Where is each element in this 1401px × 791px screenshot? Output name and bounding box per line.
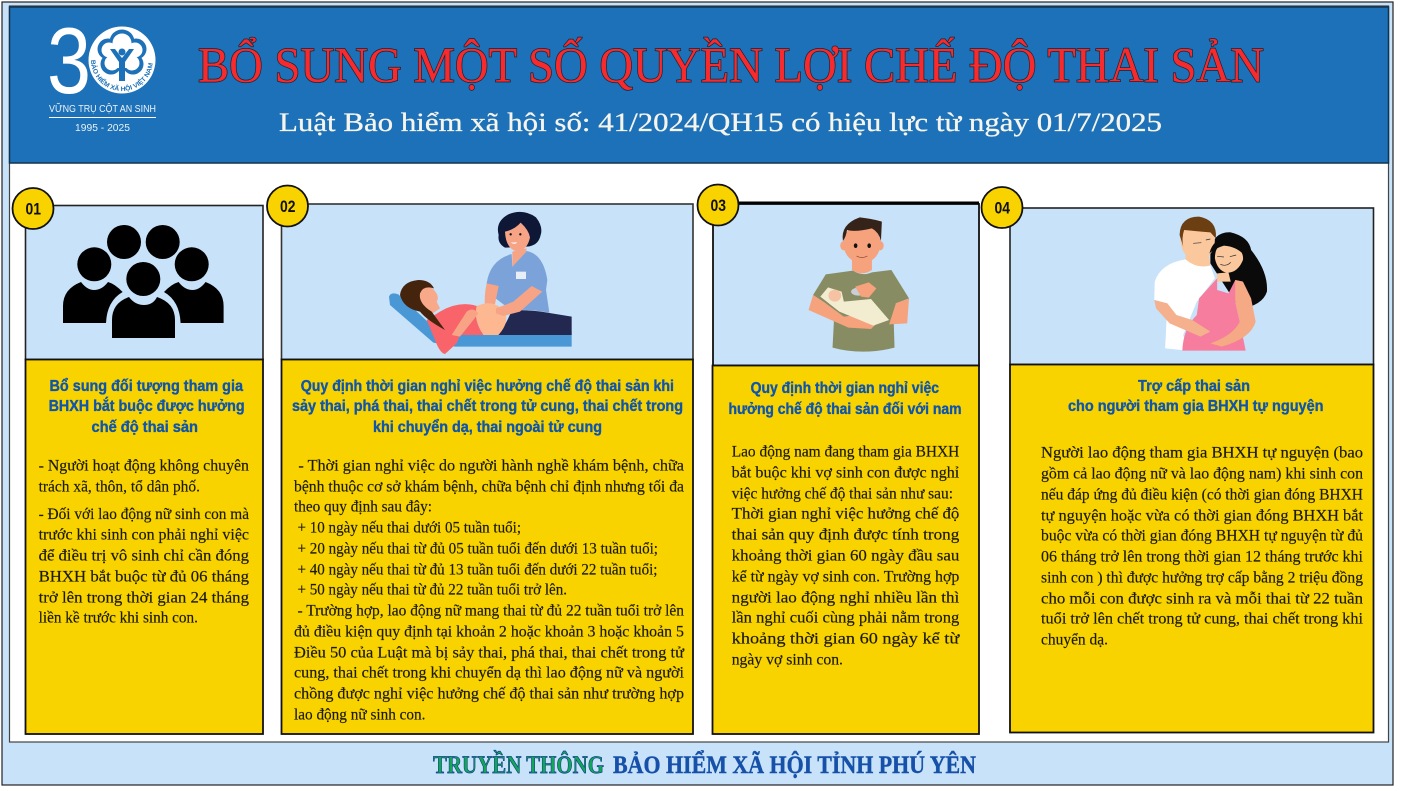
heading 01: chế độ thai sản [92, 419, 198, 436]
header banner [8, 6, 1390, 164]
heading 03: hưởng chế độ thai sản đối với nam [728, 401, 962, 418]
heading 01: BHXH bắt buộc được hưởng [49, 397, 245, 415]
body text 02: + 40 ngày nếu thai từ đủ 13 tuần tuổi đến dưới 22 tuần tuổi; [298, 562, 658, 578]
body text 01: để điều trị vô sinh chỉ cần đóng [39, 548, 249, 564]
body text 03: lần nghỉ cuối cùng phải nằm trong [732, 610, 959, 626]
body text 04: tự nguyện hoặc vừa có thời gian đóng BHXH bắt [1041, 508, 1364, 524]
body text 01: trước khi sinh con phải nghỉ việc [39, 526, 249, 544]
logo: 30 years: 3 [47, 8, 91, 113]
title: BỔ SUNG MỘT SỐ QUYỀN LỢI CHẾ ĐỘ THAI SẢN [198, 36, 1264, 92]
body text 02: + 50 ngày nếu thai từ đủ 22 tuần tuổi trở lên. [298, 582, 567, 598]
heading 02: khi chuyển dạ, thai ngoài tử cung [373, 419, 602, 436]
heading 03 [728, 380, 962, 418]
subtitle: Luật Bảo hiểm xã hội số: 41/2024/QH15 có hiệu lực từ ngày 01/7/2025 [279, 107, 1162, 137]
body text 02: Điều 50 của Luật mà bị sảy thai, phá thai, thai chết trong tử [294, 644, 685, 662]
number badge 01 [12, 188, 54, 229]
body text 01: trở lên trong thời gian 24 tháng [39, 590, 249, 606]
logo: 30 years: BẢO HIỂM XÃ HỘI VIỆT NAM [90, 60, 153, 92]
body text 03: kể từ ngày vợ sinh con. Trường hợp [732, 568, 959, 586]
body text 03: việc hưởng chế độ thai sản như sau: [732, 486, 953, 502]
body text 03 [732, 444, 961, 668]
body text 02 [294, 458, 685, 724]
body text 03: khoảng thời gian 60 ngày đầu sau [732, 548, 959, 564]
heading 02: sảy thai, phá thai, thai chết trong tử cung, thai chết trong [292, 398, 683, 415]
body text 01: liền kề trước khi sinh con. [39, 610, 198, 626]
panel 01 [12, 188, 263, 734]
body text 04 [1041, 444, 1364, 648]
body text 02: chồng được nghỉ việc hưởng chế độ thai sản như trường hợp [294, 686, 684, 702]
body text 04: gồm cả lao động nữ và lao động nam) khi sinh con [1041, 466, 1363, 482]
heading 02 [292, 378, 683, 436]
body text 04: tuổi trở lên chết trong tử cung, thai chết trong khi [1041, 610, 1364, 628]
number badge 04: 04 [994, 200, 1011, 218]
heading 04: cho người tham gia BHXH tự nguyện [1068, 398, 1324, 415]
logo: 30 years: 1995 - 2025 [75, 123, 130, 134]
illustration: father holding baby [809, 217, 909, 352]
body text 02: lao động nữ sinh con. [294, 706, 426, 724]
body text 03: bắt buộc khi vợ sinh con được nghỉ [732, 464, 960, 482]
body text 02: + 10 ngày nếu thai dưới 05 tuần tuổi; [298, 520, 521, 536]
heading 04 [1068, 378, 1324, 415]
body text 03: Lao động nam đang tham gia BHXH [732, 444, 960, 460]
illustration: nurse examining pregnant woman [389, 212, 572, 354]
body text 04: cho mỗi con được sinh ra và mỗi thai từ 22 tuần [1041, 590, 1363, 608]
body text 01: - Người hoạt động không chuyên [39, 458, 249, 474]
footer blue label: BẢO HIỂM XÃ HỘI TỈNH PHÚ YÊN [613, 750, 976, 779]
body text 01 [39, 458, 249, 626]
body text 02: cung, thai chết trong khi chuyển dạ thì lao động nữ và người [294, 664, 685, 682]
body text 04: nếu đáp ứng đủ điều kiện (có thời gian đóng BHXH [1041, 486, 1363, 504]
panel 02 [267, 186, 693, 734]
body text 01: - Đối với lao động nữ sinh con mà [39, 506, 249, 523]
heading 03: Quy định thời gian nghỉ việc [751, 380, 939, 397]
logo: 30 years: VỮNG TRỤ CỘT AN SINH [49, 102, 156, 115]
body text 02: theo quy định sau đây: [294, 498, 432, 516]
heading 02: Quy định thời gian nghỉ việc hưởng chế độ thai sản khi [301, 378, 674, 395]
body text 04: buộc vừa có thời gian đóng BHXH tự nguyện từ đủ [1041, 528, 1363, 544]
body text 04: Người lao động tham gia BHXH tự nguyện (bao [1041, 444, 1363, 462]
heading 01 [49, 378, 245, 436]
body text 02: bệnh thuộc cơ sở khám bệnh, chữa bệnh chỉ định nhưng tối đa [294, 478, 684, 496]
number badge 01: 01 [26, 200, 41, 218]
number badge 02 [267, 186, 308, 226]
body text 04: 06 tháng trở lên trong thời gian 12 tháng trước khi [1041, 548, 1364, 566]
number badge 04 [982, 187, 1022, 228]
number badge 02: 02 [280, 198, 296, 216]
body text 03: người lao động nghỉ nhiều lần thì [732, 590, 960, 606]
number badge 03: 03 [710, 197, 726, 215]
panel 03 [698, 184, 979, 734]
body text 03: ngày vợ sinh con. [732, 652, 843, 668]
body text 02: đủ điều kiện quy định tại khoản 2 hoặc khoản 3 hoặc khoản 5 [294, 624, 684, 640]
body text 04: sinh con ) thì được hưởng trợ cấp bằng 2 triệu đồng [1041, 570, 1363, 586]
body text 02: - Trường hợp, lao động nữ mang thai từ đủ 22 tuần tuổi trở lên [298, 602, 684, 620]
icon: group of people [63, 225, 224, 338]
body text 04: chuyển dạ. [1041, 632, 1108, 648]
body text 02: - Thời gian nghỉ việc do người hành nghề khám bệnh, chữa [298, 458, 684, 474]
footer green label: TRUYỀN THÔNG [433, 750, 604, 779]
panel 04 [982, 187, 1374, 732]
heading 01: Bổ sung đối tượng tham gia [50, 378, 243, 395]
illustration: expecting couple [1154, 217, 1267, 351]
body text 02: + 20 ngày nếu thai từ đủ 05 tuần tuổi đến dưới 13 tuần tuổi; [298, 540, 658, 558]
heading 04: Trợ cấp thai sản [1138, 378, 1250, 395]
logo: 30 years [47, 8, 156, 134]
body text 03: Thời gian nghỉ việc hưởng chế độ [732, 506, 959, 522]
body text 01: trách xã, thôn, tổ dân phố. [39, 478, 200, 496]
body text 03: khoảng thời gian 60 ngày kể từ [732, 630, 961, 648]
body text 03: thai sản quy định được tính trong [732, 526, 959, 544]
body text 01: BHXH bắt buộc từ đủ 06 tháng [39, 568, 249, 586]
number badge 03 [698, 184, 738, 226]
footer [433, 750, 976, 779]
